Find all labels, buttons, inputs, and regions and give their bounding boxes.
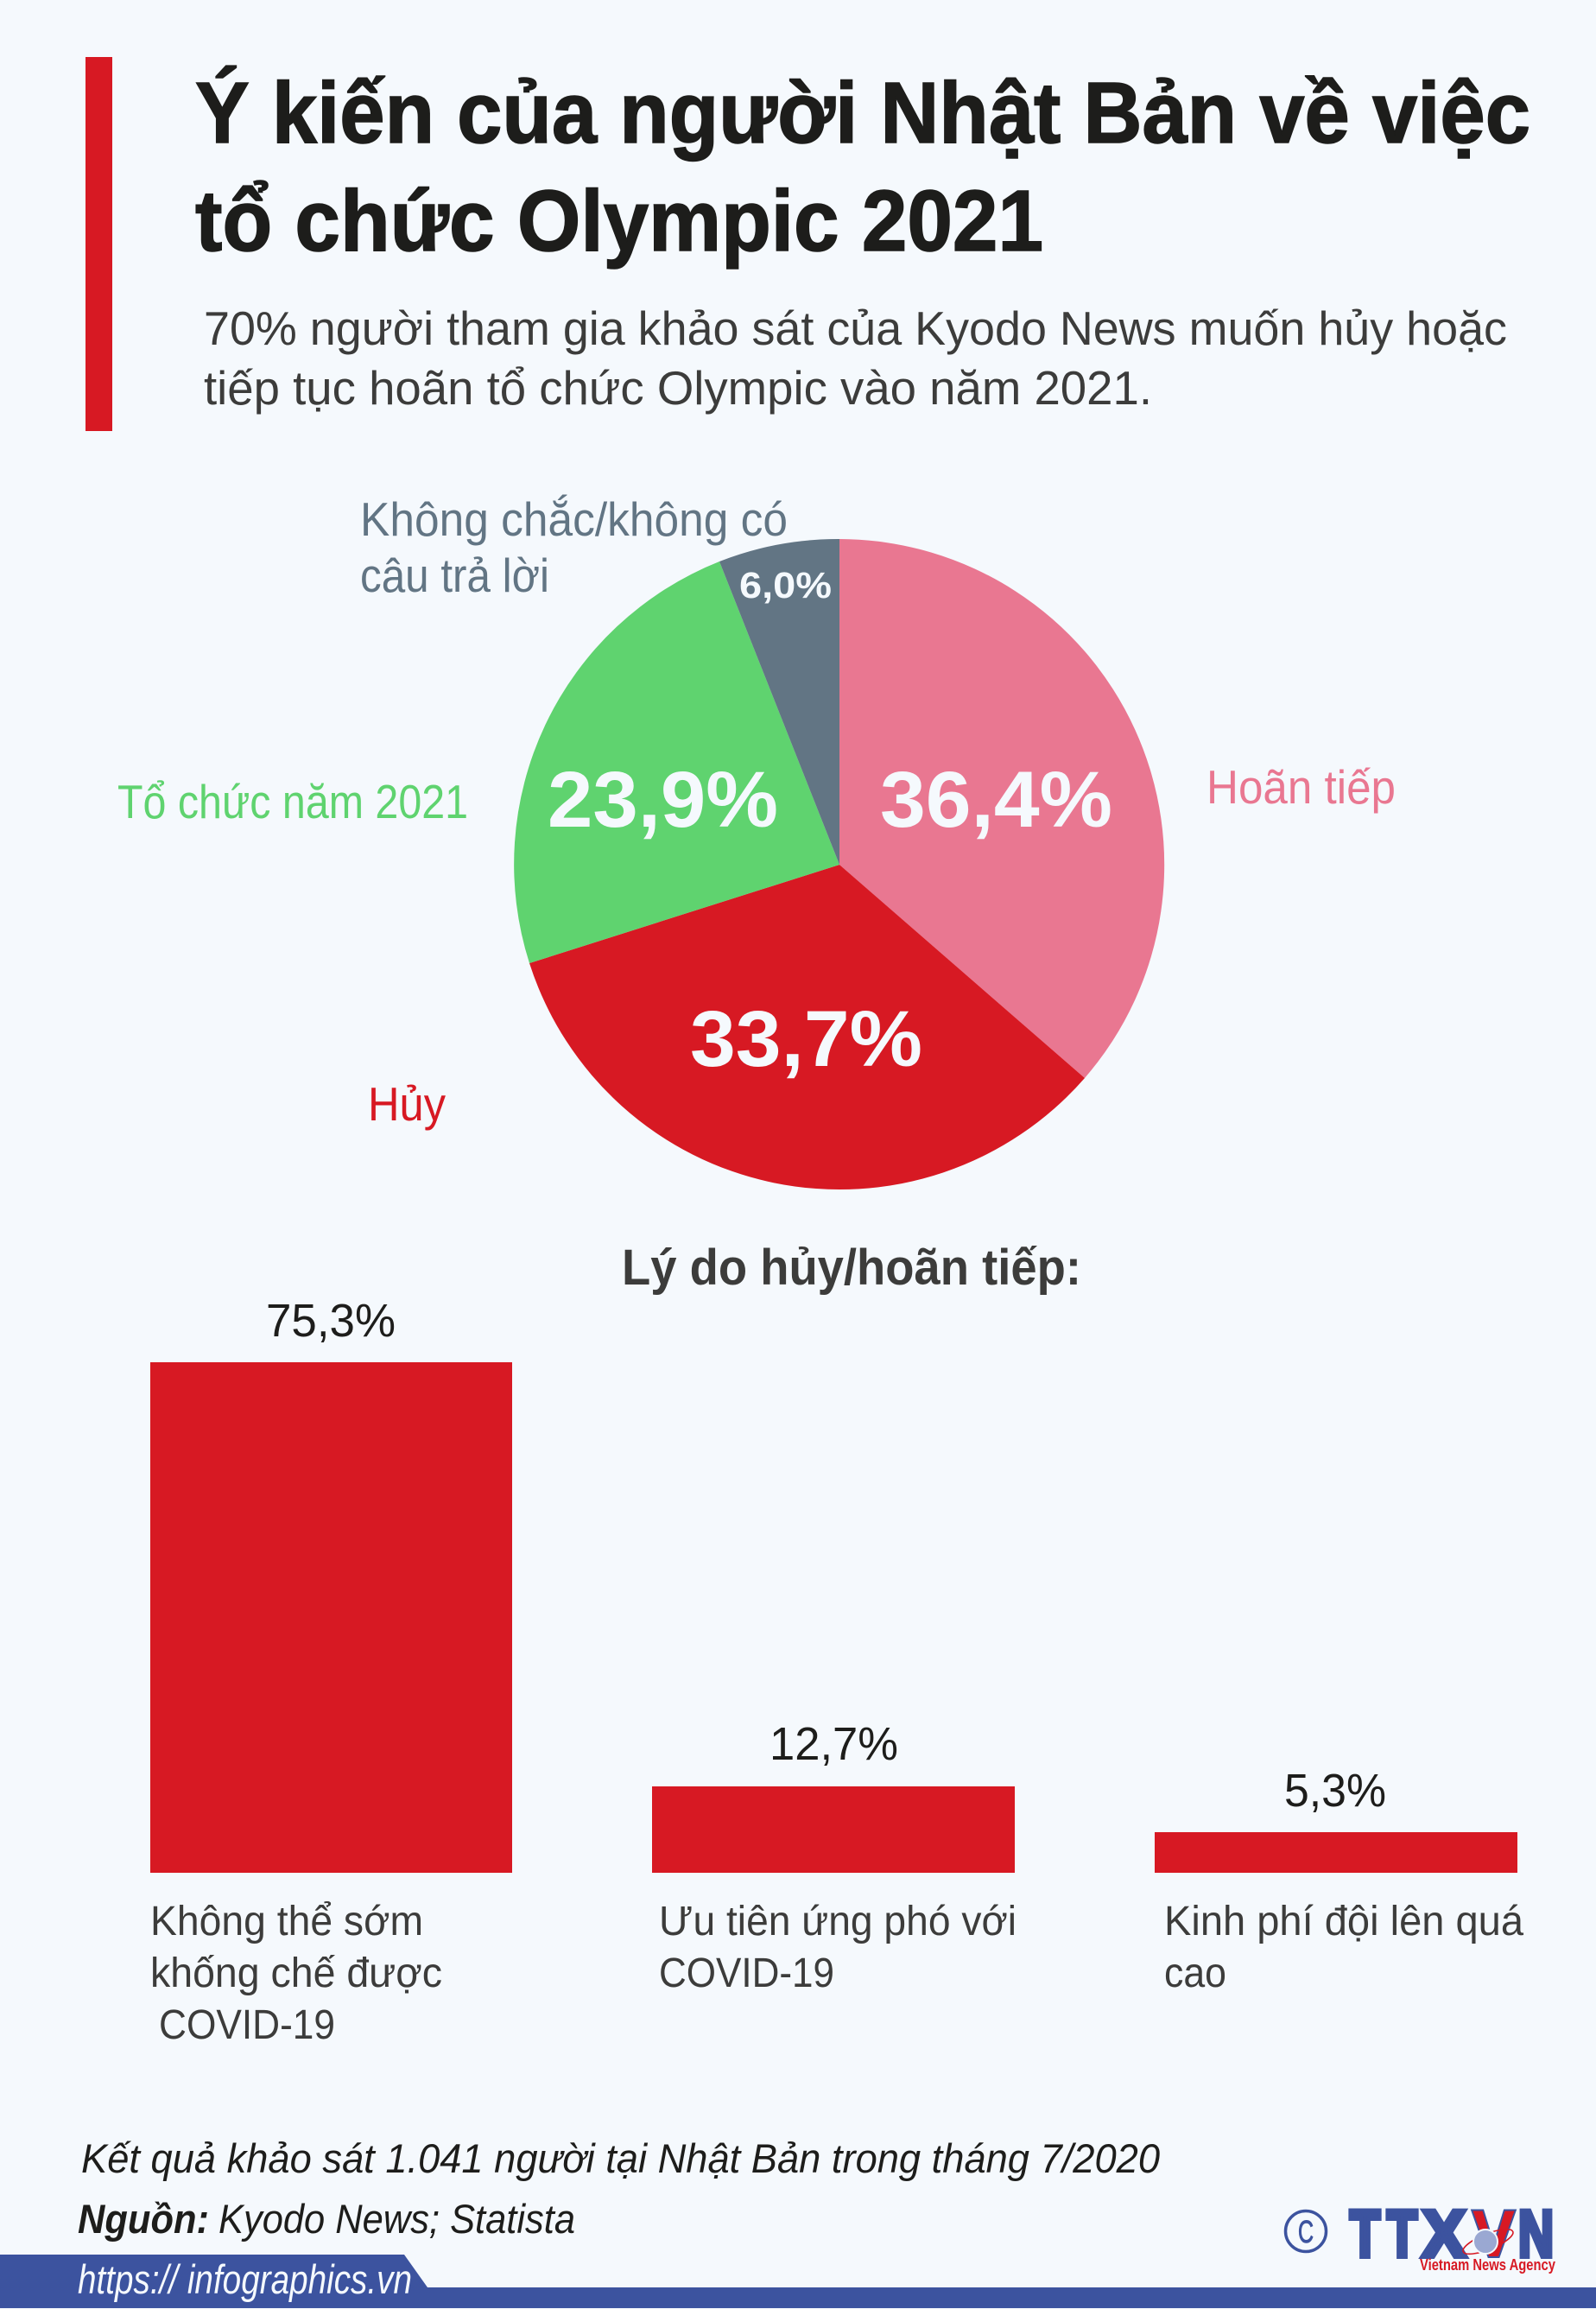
- pie label: Tổ chức năm 2021: Tổ chức năm 2021: [117, 775, 468, 828]
- value: 6,0%: 6,0%: [739, 565, 832, 606]
- logo: TTXVN Vietnam News Agency: T: [1350, 2198, 1380, 2271]
- bar: 12,7%: [652, 1718, 1015, 1873]
- pie chart: [514, 539, 1164, 1189]
- logo: TTXVN Vietnam News Agency: Vietnam News Agency: [1420, 2256, 1555, 2274]
- title: tổ chức Olympic 2021: [195, 173, 1043, 270]
- source line: Nguồn:: [78, 2196, 209, 2242]
- bar label: Không thể sớm khống chế được COVID-19: COVID-19: [159, 2002, 335, 2048]
- subtitle: [204, 301, 1507, 415]
- slice: Hoãn tiếp 36,4%: [839, 539, 1164, 1078]
- icon: copyright: C: [1298, 2214, 1314, 2249]
- title: [195, 65, 1530, 270]
- pie label: Hoãn tiếp: Hoãn tiếp: [1206, 760, 1396, 814]
- icon: globe: [1460, 2224, 1516, 2259]
- bar label: Không thể sớm khống chế được COVID-19: khống chế được: [150, 1951, 442, 1996]
- bar: 75,3%: 75,3%: [266, 1295, 396, 1347]
- slice: Hủy 33,7%: [529, 865, 1085, 1189]
- survey note: Kết quả khảo sát 1.041 người tại Nhật Bản trong tháng 7/2020: [81, 2135, 1160, 2181]
- slice: Tổ chức năm 2021 23,9%: [514, 561, 839, 963]
- source line: Kyodo News; Statista: [218, 2196, 575, 2242]
- logo: TTXVN Vietnam News Agency: X: [1422, 2198, 1466, 2271]
- value: 23,9%: 23,9%: [548, 756, 778, 844]
- source line: [78, 2196, 575, 2242]
- footer band: [0, 2255, 1596, 2308]
- bar: 75,3%: [150, 1295, 512, 1873]
- bar: 5,3%: [1155, 1765, 1517, 1873]
- pie label: Không chắc/không có câu trả lời: câu trả lời: [360, 549, 549, 602]
- logo: TTXVN Vietnam News Agency: T: [1387, 2198, 1417, 2271]
- logo: TTXVN Vietnam News Agency: [1350, 2198, 1555, 2274]
- pie label: Không chắc/không có câu trả lời: [360, 492, 788, 602]
- subtitle: tiếp tục hoãn tổ chức Olympic vào năm 2021.: [204, 361, 1152, 415]
- bar label: Kinh phí đội lên quá cao: [1164, 1899, 1523, 1996]
- bar label: Không thể sớm khống chế được COVID-19: [150, 1899, 442, 2048]
- bar label: Ưu tiên ứng phó với COVID-19: Ưu tiên ứng phó với: [659, 1899, 1016, 1944]
- logo: TTXVN Vietnam News Agency: N: [1518, 2198, 1554, 2271]
- value: 36,4%: 36,4%: [880, 756, 1112, 844]
- pie label: Hủy: Hủy: [368, 1077, 446, 1131]
- bar chart heading: Lý do hủy/hoãn tiếp:: [622, 1240, 1081, 1296]
- header accent bar: [86, 57, 112, 431]
- slice: Không chắc 6,0%: [719, 539, 839, 865]
- bar label: Kinh phí đội lên quá cao: Kinh phí đội lên quá: [1164, 1899, 1523, 1944]
- website url: https:// infographics.vn: [78, 2256, 412, 2302]
- bar label: Ưu tiên ứng phó với COVID-19: [659, 1899, 1016, 1996]
- bar label: Ưu tiên ứng phó với COVID-19: COVID-19: [659, 1951, 834, 1996]
- subtitle: 70% người tham gia khảo sát của Kyodo News muốn hủy hoặc: [204, 301, 1507, 355]
- bar chart: [150, 1295, 1523, 2048]
- pie label: Không chắc/không có câu trả lời: Không chắc/không có: [360, 492, 788, 546]
- bar: 12,7%: 12,7%: [770, 1718, 898, 1770]
- bar label: Kinh phí đội lên quá cao: cao: [1164, 1951, 1226, 1996]
- icon: copyright: [1285, 2211, 1327, 2251]
- value: 33,7%: 33,7%: [690, 995, 922, 1083]
- logo: TTXVN Vietnam News Agency: V: [1472, 2198, 1515, 2271]
- bar label: Không thể sớm khống chế được COVID-19: Không thể sớm: [150, 1899, 423, 1944]
- title: Ý kiến của người Nhật Bản về việc: [195, 65, 1530, 162]
- bar: 5,3%: 5,3%: [1284, 1765, 1386, 1817]
